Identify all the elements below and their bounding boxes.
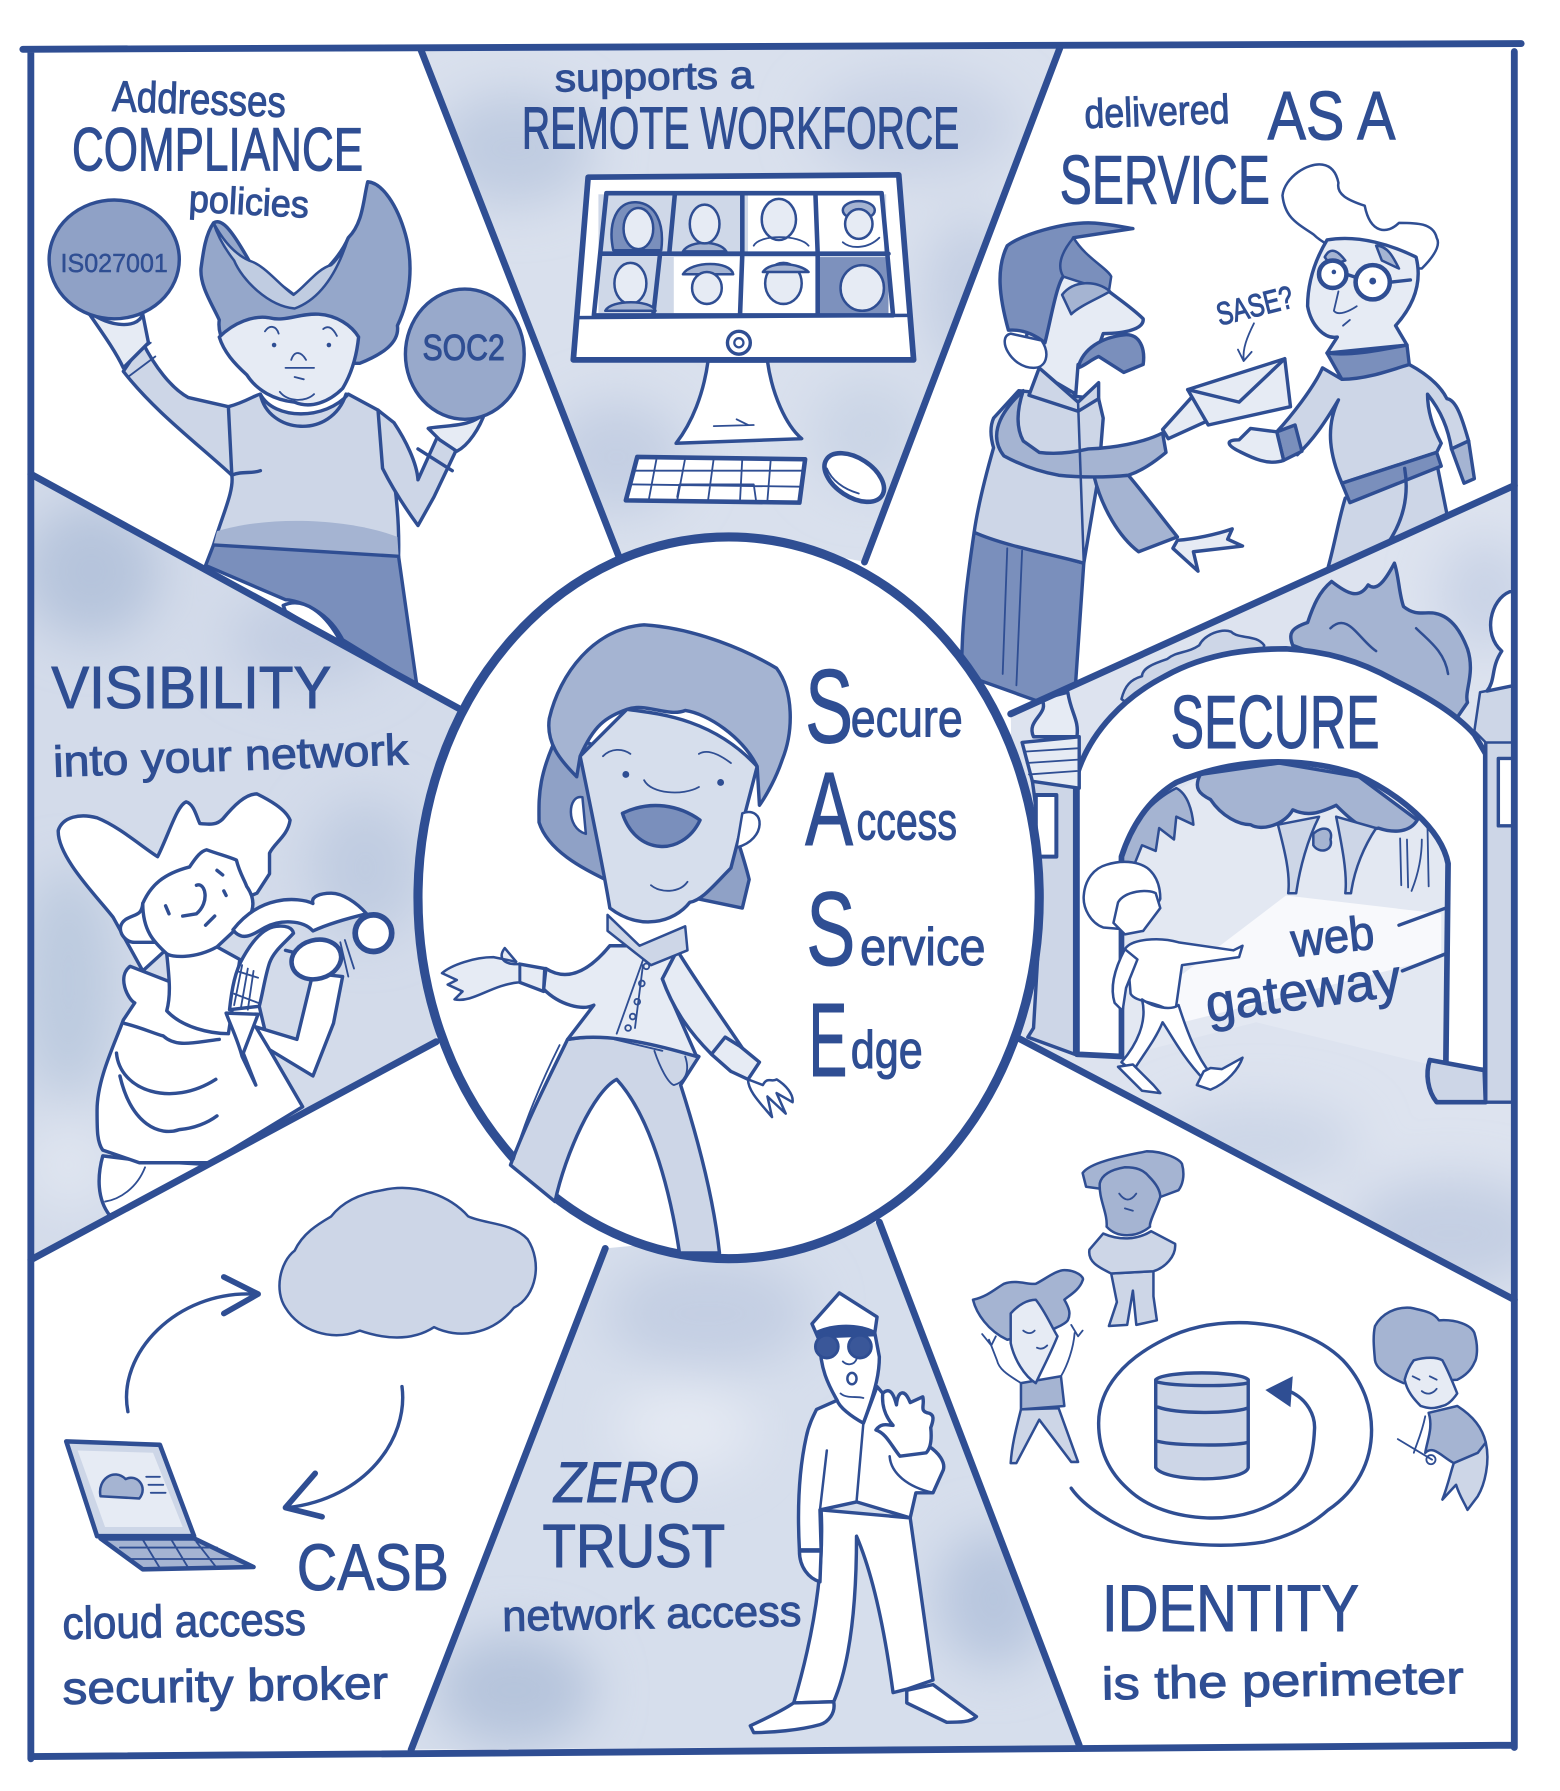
heading: service: SERVICE [1060, 141, 1270, 218]
heading: identity: IDENTITY [1102, 1572, 1359, 1646]
heading: Service [806, 871, 986, 988]
heading: security broker: security broker [62, 1657, 388, 1714]
heading: zero: ZERO [552, 1451, 699, 1515]
heading: Service: S [806, 871, 855, 988]
heading: Edge: E [809, 982, 847, 1099]
heading: Access [805, 751, 957, 868]
heading: Service: ervice [860, 918, 986, 977]
icon: laptop [66, 1441, 254, 1569]
heading: trust: TRUST [542, 1512, 725, 1581]
figure: man with glasses [1229, 164, 1474, 571]
heading: secure: SECURE [1171, 680, 1380, 764]
heading: Edge: dge [851, 1021, 923, 1080]
heading: compliance: COMPLIANCE [72, 115, 363, 184]
icon: ISO27001 ball: IS027001 [61, 248, 168, 278]
icon: circular arrow [1071, 1323, 1372, 1545]
panel: CASB [62, 1188, 536, 1714]
label: web gateway: gateway [1202, 948, 1405, 1034]
label: SASE?: SASE? [1213, 279, 1297, 332]
icon: cloud [279, 1188, 536, 1337]
figure: person with binoculars [58, 794, 392, 1215]
panel: compliance [49, 73, 524, 685]
figure: person walking through gate [1084, 862, 1243, 1093]
heading: CASB: CASB [297, 1531, 449, 1605]
heading: Access: A [805, 751, 853, 868]
panel: visibility [34, 480, 458, 1254]
heading: remote workforce: REMOTE WORKFORCE [522, 95, 959, 162]
heading: Edge [809, 982, 923, 1099]
figure: person with hands on hips [1083, 1151, 1183, 1326]
heading: policies: policies [188, 177, 310, 226]
figure: person with key [1374, 1308, 1487, 1510]
heading: supports a: supports a [554, 54, 754, 101]
figure: man with mustache handing envelope [962, 223, 1243, 714]
figure: person holding two balls [49, 182, 524, 685]
figure: person with tools [973, 1270, 1083, 1463]
heading: Secure [805, 648, 963, 765]
panel: identity [973, 1151, 1487, 1709]
icon: envelope [1188, 359, 1290, 425]
heading: network access: network access [502, 1588, 802, 1641]
icon: gateway arch [1022, 592, 1514, 1102]
arrow: laptop to cloud [127, 1277, 258, 1412]
icon: monitor with video call [573, 175, 914, 512]
icon: SOC2 ball [405, 289, 524, 419]
heading: cloud access: cloud access [62, 1594, 306, 1649]
panel: zero trust [405, 1216, 1085, 1753]
heading: visibility: VISIBILITY [51, 654, 331, 721]
icon: database [1156, 1373, 1248, 1479]
label: web gateway [1202, 907, 1446, 1034]
label: web gateway: web [1287, 907, 1377, 968]
panel: delivered as a service [962, 77, 1474, 714]
figure: smiling presenter [442, 625, 793, 1253]
heading: addresses: Addresses [112, 73, 287, 127]
heading: Secure: S [805, 648, 853, 765]
heading: Secure: ecure [851, 690, 963, 749]
heading: into your network: into your network [52, 726, 409, 787]
figure: man with sunglasses [750, 1293, 976, 1733]
heading: is the perimeter: is the perimeter [1101, 1652, 1464, 1709]
heading: delivered: delivered [1084, 86, 1230, 137]
icon: SOC2 ball: SOC2 [423, 327, 505, 368]
panel: secure web gateway [1010, 491, 1511, 1294]
panel: remote workforce [411, 46, 1062, 571]
heading: as a: AS A [1268, 77, 1396, 154]
bushes [1120, 629, 1266, 702]
icon: ISO27001 ball [49, 200, 179, 319]
arrow: cloud to laptop [286, 1387, 403, 1517]
heading: Access: ccess [857, 793, 957, 852]
arrow: to envelope [1238, 323, 1254, 361]
panel: central SASE circle [418, 537, 1039, 1259]
